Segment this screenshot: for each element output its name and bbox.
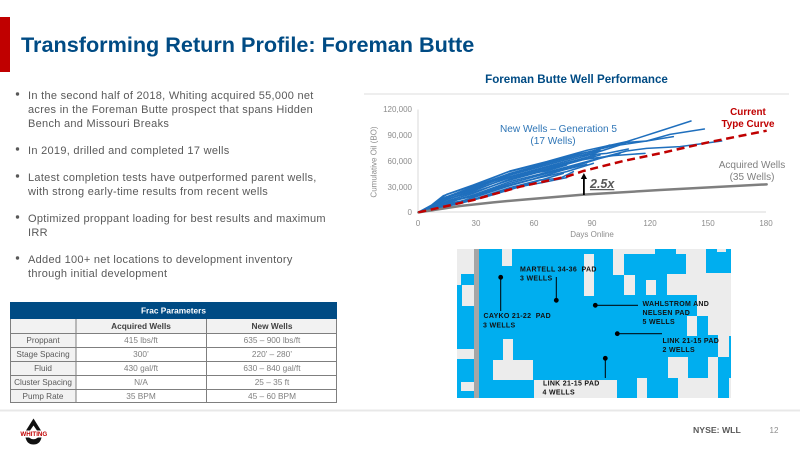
table new wells values: 25 – 35 ft xyxy=(255,377,290,387)
header accent bar xyxy=(0,17,10,72)
chart title: Foreman Butte Well Performance xyxy=(485,73,668,86)
table new wells values: 45 – 60 BPM xyxy=(248,391,296,401)
x axis labels: 60 xyxy=(530,219,539,228)
table row labels xyxy=(14,336,72,401)
label: new wells: New Wells – Generation 5 xyxy=(500,124,617,135)
callout: Link pad 2 wells xyxy=(615,331,719,354)
callout: Cayko pad: 3 WELLS xyxy=(483,322,515,330)
callout: Wahlstrom and Nelsen pad: WAHLSTROM AND xyxy=(642,301,709,308)
table acquired wells values: 415 lbs/ft xyxy=(124,335,159,345)
label: 2.5x uplift: 2.5x xyxy=(589,177,615,191)
current type curve xyxy=(418,131,767,212)
callout: Link pad 4 wells: LINK 21-15 PAD xyxy=(543,380,600,388)
callout: Martell pad: 3 WELLS xyxy=(520,276,552,282)
page number: 12 xyxy=(770,426,779,435)
callout: Link pad 4 wells: 4 WELLS xyxy=(542,390,575,396)
callout: Link pad 4 wells xyxy=(542,356,608,396)
x axis labels: 30 xyxy=(472,219,481,228)
y axis title: Cumulative Oil (BO) xyxy=(370,126,378,198)
map road xyxy=(474,249,479,398)
x axis labels: 120 xyxy=(643,219,657,228)
table header xyxy=(10,302,337,319)
table column headings: New Wells xyxy=(252,321,293,331)
table: frac parameters xyxy=(10,302,337,403)
callout: Martell pad: MARTELL 34-36 PAD xyxy=(520,266,597,274)
label: new wells: (17 Wells) xyxy=(530,136,576,147)
callout: Link pad 2 wells: 2 WELLS xyxy=(662,347,695,354)
bullet: proppant loading xyxy=(16,213,326,239)
x axis labels: 0 xyxy=(416,219,421,228)
bullet: acquisition: In the second half of 2018, Whiting acquired 55,000 net xyxy=(28,90,314,102)
logo: Whiting xyxy=(20,418,47,444)
map acreage xyxy=(457,249,731,398)
label: acquired wells xyxy=(719,160,785,183)
x axis title: Days Online xyxy=(570,230,614,239)
table new wells values: 630 – 840 gal/ft xyxy=(243,363,301,373)
table acquired wells values: N/A xyxy=(134,377,148,387)
table acquired wells values: 430 gal/ft xyxy=(124,363,159,373)
bullet: completion tests: Latest completion tests have outperformed parent wells, xyxy=(28,172,317,184)
table acquired wells values xyxy=(124,335,159,401)
table row labels: Stage Spacing xyxy=(16,350,70,359)
callout: Martell pad xyxy=(520,266,597,303)
bullet: acquisition: Bench and Missouri Breaks xyxy=(28,118,169,130)
table new wells values xyxy=(243,335,301,401)
label: new wells xyxy=(500,124,617,147)
table new wells values: 220’ – 280’ xyxy=(252,349,292,359)
new wells curves xyxy=(418,121,722,212)
title: Transforming Return Profile: Foreman Butte xyxy=(21,32,474,57)
x axis labels: 90 xyxy=(588,219,597,228)
table row labels: Cluster Spacing xyxy=(14,378,72,387)
label: current type curve xyxy=(721,107,775,130)
bullet: completion tests: with strong early-time results from recent wells xyxy=(27,186,268,198)
footer rule xyxy=(0,410,800,412)
label: acquired wells: Acquired Wells xyxy=(719,160,785,171)
table acquired wells values: 300’ xyxy=(133,349,149,359)
label: current type curve: Current xyxy=(730,107,767,118)
callout: Wahlstrom and Nelsen pad: NELSEN PAD xyxy=(642,310,690,317)
chart axes xyxy=(418,110,766,212)
x axis labels: 180 xyxy=(759,219,773,228)
callout: Wahlstrom and Nelsen pad xyxy=(593,301,709,326)
footer ticker: NYSE: WLL xyxy=(693,425,741,435)
table acquired wells values: 35 BPM xyxy=(126,391,156,401)
bullet: net locations: Added 100+ net locations to development inventory xyxy=(28,254,293,266)
callout: Cayko pad: CAYKO 21-22 PAD xyxy=(484,313,551,320)
table row labels: Fluid xyxy=(34,364,52,373)
table new wells values: 635 – 900 lbs/ft xyxy=(244,335,301,345)
label: acquired wells: (35 Wells) xyxy=(730,172,774,183)
y axis labels xyxy=(383,105,413,217)
table header: Frac Parameters xyxy=(141,306,206,316)
arrow: uplift xyxy=(581,173,587,195)
table column headings xyxy=(111,321,293,331)
logo: Whiting: WHITING xyxy=(20,431,47,438)
acquired wells curve xyxy=(418,184,767,212)
y axis labels: 60,000 xyxy=(388,157,413,166)
x axis labels: 150 xyxy=(701,219,715,228)
y axis labels: 90,000 xyxy=(388,131,413,140)
bullet: proppant loading: IRR xyxy=(28,227,48,239)
bullet: 2019 drilling: In 2019, drilled and completed 17 wells xyxy=(28,145,230,157)
callout: Wahlstrom and Nelsen pad: 5 WELLS xyxy=(642,319,675,326)
table row labels: Pump Rate xyxy=(23,392,64,401)
bullet: proppant loading: Optimized proppant loading for best results and maximum xyxy=(28,213,326,225)
callout: Link pad 2 wells: LINK 21-15 PAD xyxy=(662,338,719,345)
bullet: completion tests xyxy=(16,172,317,198)
line chart: well performance xyxy=(370,105,785,239)
bullet: acquisition xyxy=(16,90,314,130)
y axis labels: 120,000 xyxy=(383,105,413,114)
bullet list xyxy=(16,90,326,280)
label: current type curve: Type Curve xyxy=(721,119,775,130)
map: well pads xyxy=(457,249,731,398)
bullet: acquisition: acres in the Foreman Butte prospect that spans Hidden xyxy=(28,104,313,116)
bullet: net locations: through initial development xyxy=(28,268,167,280)
table column headings: Acquired Wells xyxy=(111,321,171,331)
bullet: net locations xyxy=(16,254,293,280)
y axis labels: 0 xyxy=(408,208,413,217)
x axis labels xyxy=(416,219,773,228)
map leased gaps xyxy=(461,249,726,391)
table row labels: Proppant xyxy=(26,336,60,345)
y axis labels: 30,000 xyxy=(388,183,413,192)
callout: Cayko pad xyxy=(483,275,551,330)
map background xyxy=(457,249,731,398)
